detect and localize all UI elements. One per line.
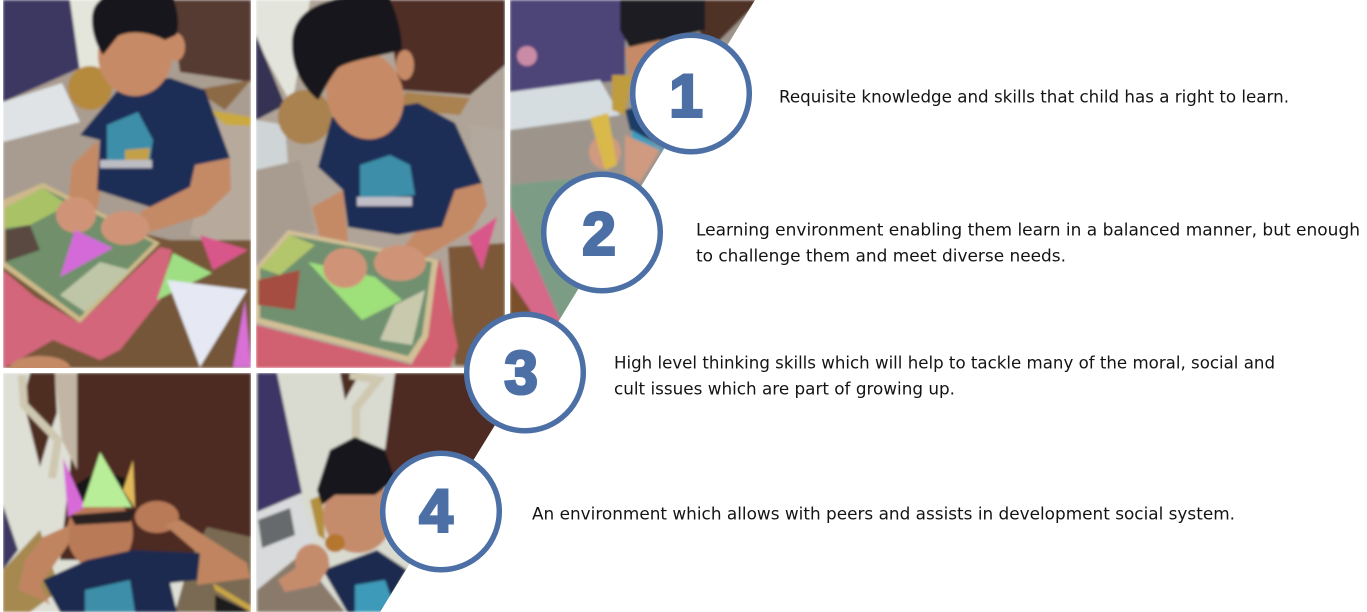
digit 4: 4 — [419, 478, 453, 544]
number badge 1 — [633, 35, 749, 152]
photo: boy with bottle, cut by diagonal — [510, 0, 755, 322]
number badge 3 — [467, 314, 583, 431]
text: point 3: cult issues which are part of growing up. — [614, 380, 955, 398]
text: point 2: Learning environment enabling them learn in a balanced manner, but enough — [696, 220, 1360, 240]
text: point 3 — [614, 354, 1275, 398]
photo: boy wearing paper crown — [3, 373, 251, 612]
photo: boy folding green paper — [256, 0, 505, 368]
digit 3: 3 — [504, 340, 538, 406]
text: point 1: Requisite knowledge and skills that child has a right to learn. — [779, 88, 1289, 106]
number badge 4 — [383, 453, 499, 570]
photo: boy folding pink paper — [3, 0, 251, 380]
digit 2: 2 — [582, 200, 616, 268]
text: point 2 — [696, 220, 1360, 266]
text: point 2: to challenge them and meet diverse needs. — [696, 246, 1066, 266]
photo: boy eating, cut by diagonal — [256, 373, 495, 612]
digit 1: 1 — [669, 62, 703, 130]
text: point 3: High level thinking skills which will help to tackle many of the moral, social and — [614, 354, 1275, 372]
number badge 2 — [544, 174, 660, 291]
text: point 4: An environment which allows with peers and assists in development social system. — [532, 504, 1235, 524]
